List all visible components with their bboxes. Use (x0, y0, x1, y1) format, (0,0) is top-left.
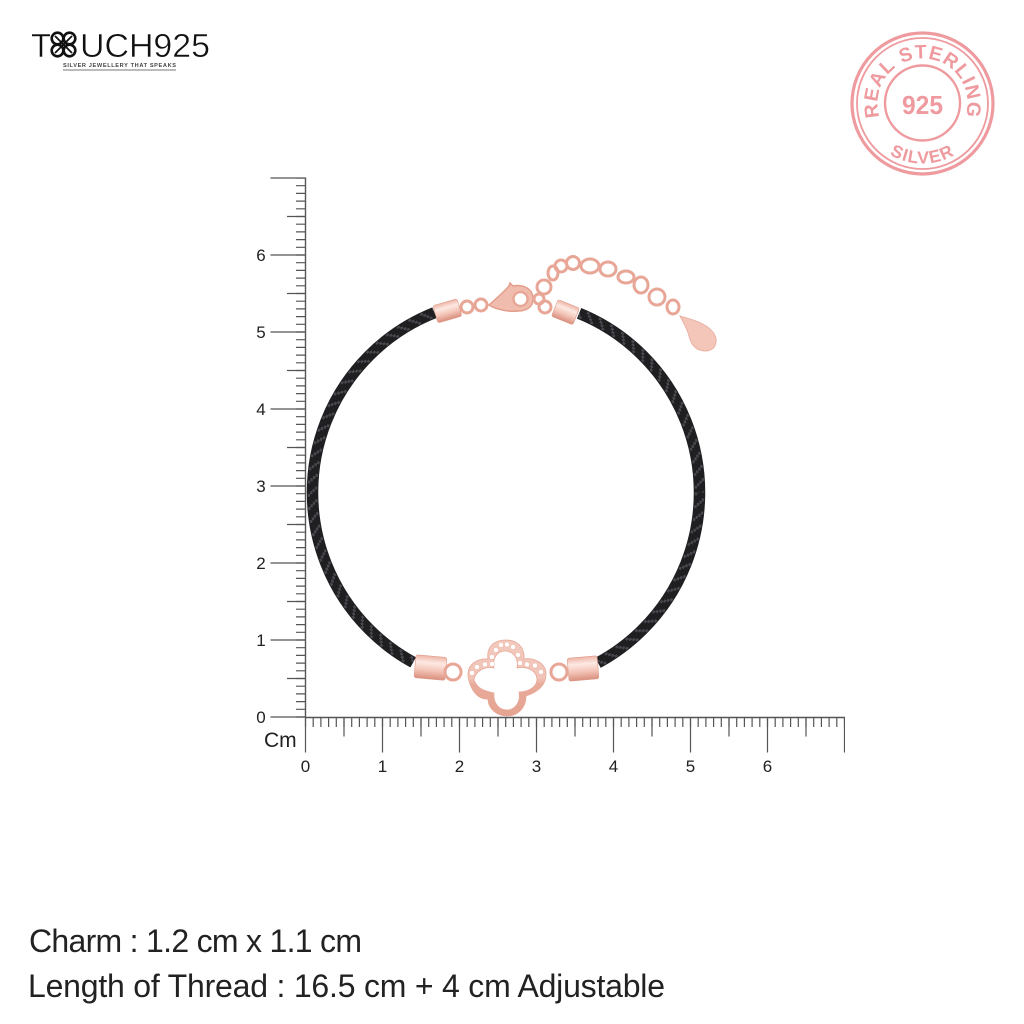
metal cap: top left (433, 299, 462, 323)
thread length text: Length of Thread : 16.5 cm + 4 cm Adjustable (28, 968, 665, 1004)
metal cap: top right (551, 300, 579, 325)
vertical ruler labels: 3 (256, 477, 266, 496)
charm stones (470, 642, 544, 676)
vertical ruler labels (256, 246, 266, 727)
stamp centre number: 925 (902, 90, 943, 120)
horizontal ruler labels: 1 (378, 757, 387, 776)
horizontal ruler labels: 2 (455, 757, 464, 776)
clasp chain and extender (461, 256, 679, 314)
horizontal ruler labels: 0 (301, 757, 310, 776)
ruler unit label: Cm (264, 729, 297, 752)
logo: Touch925 (31, 27, 210, 70)
lobster clasp (489, 283, 533, 311)
vertical ruler labels: 5 (256, 323, 266, 342)
logo tagline: SILVER JEWELLERY THAT SPEAKS (63, 63, 176, 69)
vertical ruler labels: 4 (256, 400, 266, 419)
extender links (534, 256, 679, 314)
vertical ruler labels: 0 (256, 708, 266, 727)
vertical ruler (288, 177, 306, 718)
vertical ruler labels: 2 (256, 554, 266, 573)
stamp: real sterling silver 925 (850, 31, 995, 176)
teardrop tag (680, 316, 716, 351)
vertical ruler labels: 1 (256, 631, 266, 650)
stamp top text: REAL STERLING (864, 44, 981, 118)
horizontal ruler labels: 6 (763, 757, 772, 776)
quatrefoil charm (468, 640, 546, 716)
logo icon: clover knot (52, 33, 75, 56)
stamp bottom text: SILVER (891, 145, 954, 164)
black twisted cord (309, 295, 703, 690)
connector ring: left (445, 664, 461, 680)
charm size text: Charm : 1.2 cm x 1.1 cm (29, 923, 362, 959)
horizontal ruler labels: 3 (532, 757, 541, 776)
metal cap: bottom left (414, 655, 447, 680)
horizontal ruler labels: 4 (609, 757, 618, 776)
logo wordmark letter T: T (31, 27, 51, 64)
horizontal ruler labels (301, 757, 772, 776)
connector ring: right (551, 664, 567, 680)
metal cap: bottom right (567, 656, 599, 681)
vertical ruler labels: 6 (256, 246, 266, 265)
horizontal ruler labels: 5 (686, 757, 695, 776)
logo wordmark UCH925: UCH925 (80, 27, 210, 64)
horizontal ruler (305, 718, 845, 735)
